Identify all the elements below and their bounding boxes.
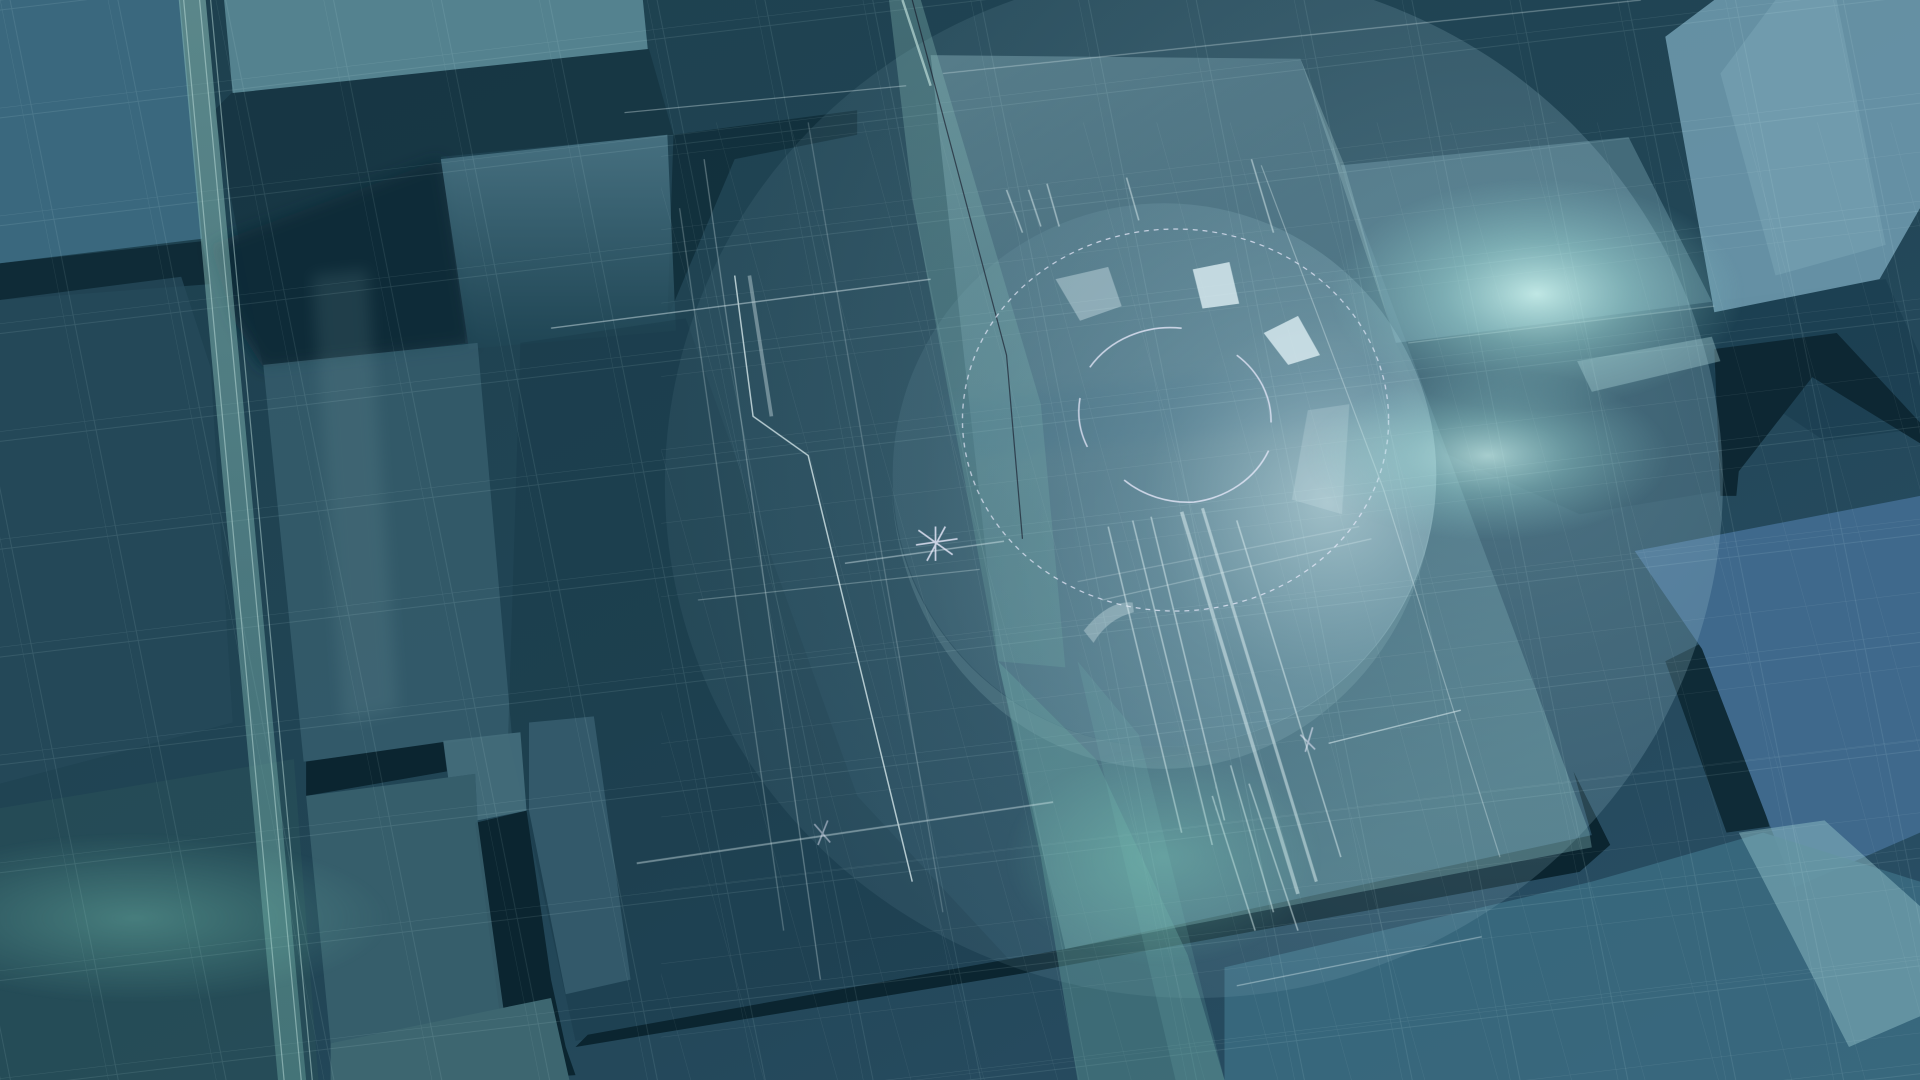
circuit faint lines bbox=[624, 0, 1714, 986]
arrow shaped accent bbox=[1577, 337, 1720, 392]
center teal strip bbox=[889, 0, 1224, 1080]
dashed ring bbox=[962, 229, 1389, 611]
panel: lower right pale cube bbox=[1739, 820, 1920, 1047]
glow spots bbox=[0, 178, 1745, 1004]
panel: right upper dark band bbox=[1396, 279, 1920, 514]
vertical bars under the sphere bbox=[1007, 159, 1341, 931]
center panel side bbox=[1300, 59, 1390, 324]
panel: lower left block bbox=[306, 774, 504, 1043]
panel: inner column shading bbox=[312, 269, 398, 722]
circuit bright lines bbox=[551, 276, 1461, 882]
inner ring arcs bbox=[1079, 328, 1271, 502]
panel: right zigzag dark bbox=[1714, 333, 1920, 496]
large translucent disc bbox=[665, 0, 1723, 998]
left teal strip bbox=[179, 0, 312, 1080]
panel: upper middle bbox=[441, 135, 676, 349]
dark shadow areas bbox=[0, 49, 1769, 833]
panel: middle dark floor bbox=[508, 318, 1016, 1041]
panel: top left bbox=[0, 0, 202, 263]
center glass panel bbox=[931, 55, 1592, 949]
panel: left block bbox=[0, 277, 233, 784]
sphere lower rim bbox=[891, 475, 1435, 769]
panel: top strip bbox=[224, 0, 648, 93]
panel: left column bbox=[263, 343, 512, 762]
panel: right blue block bbox=[1635, 496, 1920, 888]
panel: bottom left floor bbox=[0, 759, 318, 1080]
panel: small square bbox=[443, 732, 527, 820]
dark gaps bbox=[306, 742, 1610, 1080]
center panel dark band bbox=[943, 355, 1408, 459]
panel: upper right inner cube bbox=[1720, 0, 1886, 276]
white tabs on ring bbox=[1056, 262, 1349, 643]
panel: lower left foot bbox=[331, 998, 569, 1080]
panel: lower right blue floor bbox=[1224, 833, 1920, 1080]
panel: right upper light bbox=[1341, 137, 1714, 343]
star marks bbox=[814, 527, 1315, 845]
sphere bbox=[893, 203, 1436, 747]
panel: lower left tall block bbox=[529, 716, 631, 994]
panel: upper right cube bbox=[1665, 0, 1920, 312]
